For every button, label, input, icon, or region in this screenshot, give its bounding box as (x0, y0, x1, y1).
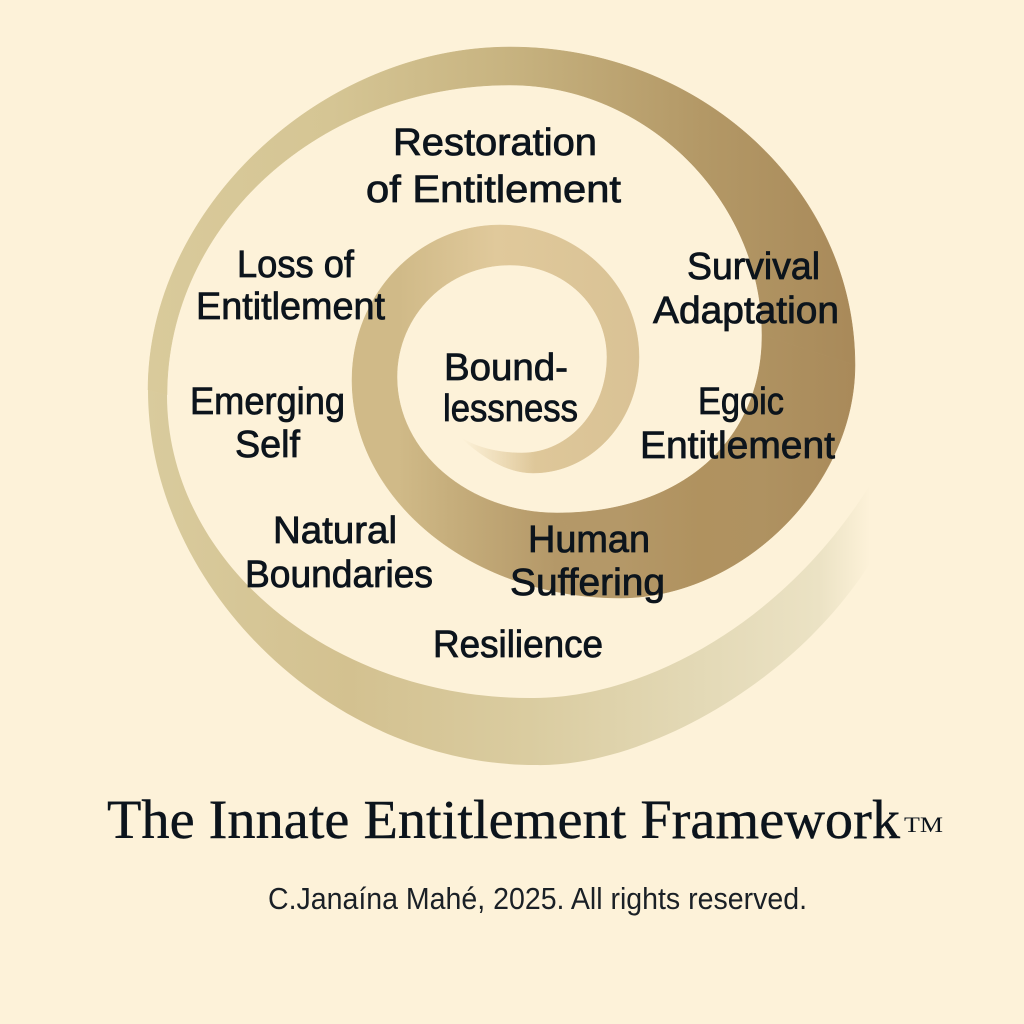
label: Egoic Entitlement: Egoic (698, 381, 784, 423)
spiral (148, 47, 895, 765)
label: Human Suffering: Suffering (510, 562, 665, 604)
spiral: upper outer arm (148, 47, 855, 395)
label: Emerging Self (190, 381, 345, 466)
spiral: inner tip fade (455, 428, 535, 481)
label: Boundlessness (443, 347, 578, 430)
label: Boundlessness: lessness (443, 388, 578, 430)
label: Restoration of Entitlement: Restoration (393, 122, 597, 164)
label: Egoic Entitlement (640, 381, 835, 467)
label: Loss of Entitlement: Loss of (237, 244, 354, 286)
spiral: right and bottom dark arm (557, 335, 855, 598)
spiral: inner ring (352, 225, 639, 473)
label: Restoration of Entitlement (366, 122, 621, 211)
label: Boundlessness: Bound- (444, 347, 568, 389)
label: Natural Boundaries: Boundaries (245, 554, 433, 596)
label: Survival Adaptation: Adaptation (653, 290, 839, 332)
label: Loss of Entitlement: Entitlement (196, 286, 385, 328)
label: Emerging Self: Self (235, 424, 300, 466)
label: Human Suffering (510, 519, 665, 604)
label: Resilience: Resilience (433, 624, 603, 666)
label: Survival Adaptation (653, 246, 839, 332)
spiral: lower inner sweep (352, 377, 620, 598)
label: Restoration of Entitlement: of Entitlement (366, 169, 621, 211)
copyright line: C.Janaína Mahé, 2025. All rights reserved. (268, 881, 807, 916)
title: The Innate Entitlement Framework (107, 789, 901, 850)
label: Natural Boundaries (245, 510, 433, 596)
label: Emerging Self: Emerging (190, 381, 345, 423)
label: Human Suffering: Human (528, 519, 650, 561)
label: Loss of Entitlement (196, 244, 385, 328)
label: Natural Boundaries: Natural (273, 510, 397, 552)
label: Egoic Entitlement: Entitlement (640, 425, 835, 467)
label: Survival Adaptation: Survival (687, 246, 820, 288)
title: TM (904, 812, 943, 837)
spiral: fading outer tail (148, 390, 895, 765)
